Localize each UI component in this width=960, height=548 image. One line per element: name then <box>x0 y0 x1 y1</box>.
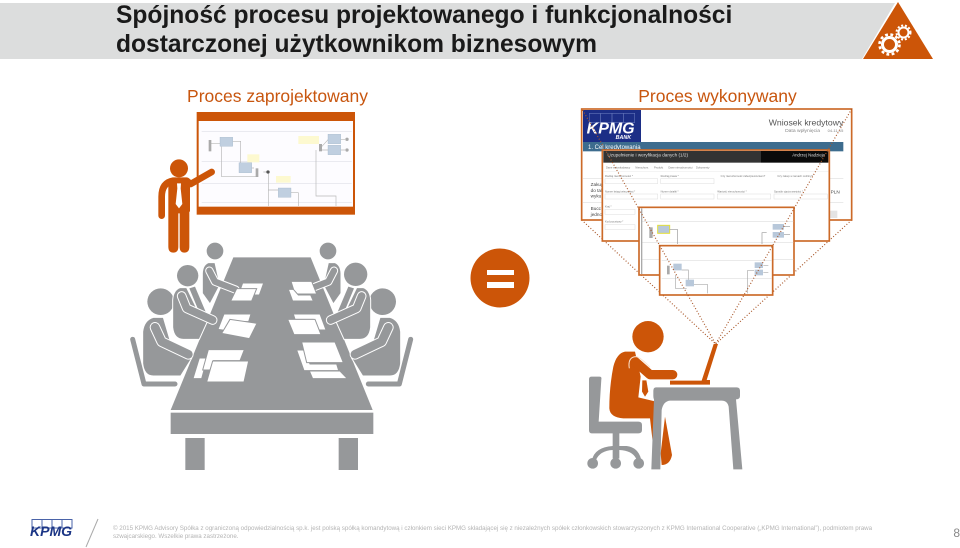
heading: executed process: Proces wykonywany <box>638 86 797 106</box>
screen 1: credit application: Data wpłynięcia <box>785 128 820 134</box>
header band <box>0 3 895 59</box>
screen 2: verification form: Rodzaj prawa * <box>661 174 679 178</box>
table leg left <box>185 438 205 470</box>
desk <box>651 387 742 469</box>
screen 2: verification form: Kraj * <box>605 204 611 208</box>
screen 1: credit application: BANK <box>616 135 632 141</box>
page number: 8 <box>953 526 960 540</box>
heading: designed process: Proces zaprojektowany <box>187 86 368 106</box>
presenter figure <box>162 159 212 253</box>
screen 2: verification form: Czy nieruchomość zabezpieczeniem? <box>721 174 766 178</box>
screen 2: verification form: Czy zakup w ramach rodziny? <box>777 174 813 178</box>
screen 1: credit application: 1. Cel kredytowania <box>588 145 641 151</box>
screen 2: verification form: Andrzej Nadzieja <box>792 153 826 158</box>
table edge <box>171 413 373 434</box>
screen 3: process diagram <box>639 207 794 275</box>
screen 2: verification form: Nieruchom. <box>635 165 649 169</box>
footer KPMG logo: KPMG <box>30 523 72 539</box>
screen 2: verification form: Dokumenty <box>696 165 710 169</box>
conference table with people <box>133 243 411 470</box>
screen 1: credit application: wykup <box>591 194 604 199</box>
right team <box>308 243 411 384</box>
screen 2: verification form: Dane wnioskodawcy <box>606 165 631 169</box>
screen 2: verification form: Numer księgi wieczystej * <box>605 189 635 193</box>
screen 1: credit application: 04-11-15 <box>828 128 844 133</box>
table leg right <box>339 438 358 470</box>
title: Spójność procesu projektowanego i funkcjonalności <box>116 2 732 29</box>
screen 2: verification form: Wartość nieruchomości * <box>717 189 747 193</box>
left team <box>133 243 236 384</box>
screen 1: credit application: KPMG <box>587 120 635 137</box>
projection rays front <box>583 109 852 344</box>
screen 1: credit application: do tak <box>591 188 604 193</box>
screen 2: verification form: Uzupełnienie i weryfikacja danych (1/2) <box>607 153 689 158</box>
screen 1: credit application: Zakup <box>591 182 604 187</box>
footer legal text: © 2015 KPMG Advisory Spółka z ograniczoną odpowiedzialnością sp.k. jest polską spółką komandytową i członkiem sieci KPMG składającej się z niezależnych spółek członkowskich stowarzyszonych z KPMG International Cooperative („KPMG International”), podmiotem prawa <box>113 525 873 532</box>
screen 2: verification form: Numer działki * <box>661 189 679 193</box>
table top <box>171 257 373 410</box>
screen 1: credit application: jedno <box>590 212 602 217</box>
icon: orange triangle with gears <box>863 2 933 59</box>
screen 2: verification form: Dane nieruchomości <box>668 165 693 169</box>
equals sign badge <box>470 248 530 308</box>
executed process stacked screens <box>582 109 852 344</box>
screen 2: verification form: Kod pocztowy * <box>605 220 623 224</box>
title: dostarczonej użytkownikom biznesowym <box>116 31 597 58</box>
person <box>609 321 718 465</box>
footer legal text: szwajcarskiego. Wszelkie prawa zastrzeżone. <box>113 533 239 540</box>
footer slash <box>86 519 98 547</box>
screen 2: verification form: Rodzaj nieruchomości * <box>605 174 633 178</box>
screen 1: credit application: Wniosek kredytowy <box>769 118 844 128</box>
screen 1: credit application <box>582 109 852 220</box>
screen 1: credit application: PLN <box>831 189 840 194</box>
papers on table <box>193 281 347 382</box>
screen 4: process diagram detail <box>660 246 773 295</box>
screen 1: credit application: Bucc <box>591 206 602 211</box>
seated user at laptop <box>587 321 742 469</box>
presentation board with process diagram <box>197 112 355 215</box>
office chair <box>587 377 644 469</box>
laptop <box>670 344 718 385</box>
screen 2: verification form: Produkt <box>654 165 663 169</box>
screen 2: verification form: Sposób ujęcia wartości * <box>774 189 803 193</box>
projection rays rear <box>582 220 852 344</box>
screen 2: verification form <box>602 150 829 241</box>
